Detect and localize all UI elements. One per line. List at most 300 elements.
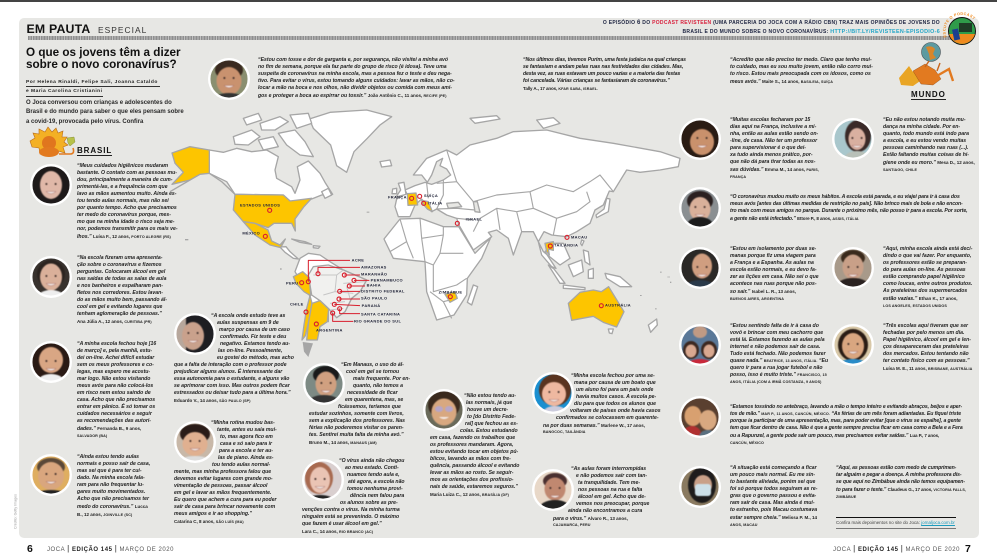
quote: Marlene: confirmados se colocassem em quarente- [556, 414, 659, 420]
quote: Lucca: Acho que não precisamos ter [77, 496, 149, 502]
map labels [240, 193, 631, 332]
footer: right info: JOCA | EDIÇÃO 145 | MARÇO DE 2020 [833, 544, 960, 553]
quote: Maria Luiza: estou evitando tocar em objetos pú- [430, 448, 518, 454]
map labels: ESTADOS UNIDOS [240, 202, 280, 207]
quote: Luísa M: Papel higiênico, álcool em gel e len- [883, 336, 971, 342]
quote: Melissa: foi só porque todos seguiram as re- [730, 486, 817, 492]
quote: Mar and Lua: porque ia participar de uma apresentação, mas, para poder evitar [que o vírus se espalhe], a gente [730, 418, 961, 424]
quote: Luísa F [76, 162, 178, 240]
quote: Beatrice and Francisco: posso, isso é muito triste.” FRANCISCO, 15 [730, 372, 827, 378]
quote: Eduardo: las on-line. Pessoalmente, [218, 348, 282, 354]
quote: Maria Luiza: os professores mandaram. Agora, [430, 442, 513, 448]
quote: Catarina: casa e só saio para ir [220, 440, 272, 446]
map labels: SÃO PAULO [361, 295, 387, 300]
quote: Melissa: to estranho, pois Macau costumava [730, 506, 817, 512]
quote: Emma: sas dúvidas.” Emma M., 14 anos, PARIS, [730, 167, 819, 173]
heading: section subtitle: ESPECIAL [98, 25, 147, 35]
quote: Isabel: BUENOS AIRES, ARGENTINA [730, 296, 784, 300]
photo: Mesa [832, 118, 874, 160]
quote: Catarina: vimentação de pessoas, passar álcool [174, 482, 267, 488]
quote: Maite [730, 56, 873, 84]
map labels: BAHIA [367, 283, 381, 288]
quote: Eduardo: estressados ou deixar tudo para a última hora.” [174, 390, 291, 396]
quote: João [258, 56, 455, 98]
quote: Ana Júlia: fletos nos corredores. Estou lavan- [77, 290, 163, 296]
map labels: ISRAEL [466, 216, 483, 221]
quote: Ana Júlia: cool em gel e evitando lugares que [77, 304, 162, 310]
quote: Melissa: estar sempre cheia.” Melissa P. M., 14 [730, 514, 817, 520]
quote: Catarina: las de piano. Ainda es- [218, 454, 274, 460]
quote: Alvaro: ta tranquilidade. Tem me- [578, 480, 640, 486]
quote: Eduardo: que a falta de interação com o professor pode [174, 362, 287, 368]
quote: Maria Luiza: to [do Distrito Fede- [467, 414, 516, 420]
quote: Marlene [543, 372, 661, 434]
quote: Luísa F: mo que na minha idade o risco seja me- [77, 218, 174, 224]
quote: João: tivo. Para evitar o vírus, estou tomando alguns cuidados: lavar as mãos, não co- [258, 78, 455, 84]
quote: Emma: FRANÇA [730, 175, 746, 179]
quote: Beatrice and Francisco: internet e não podemos sair de casa. [730, 344, 820, 350]
quote: Emma: que não dá para tirar todas as nos- [730, 159, 815, 165]
quote: Bruno [309, 362, 410, 445]
quote: Claudeus: tar alguém e pegar a doença. A minha professora dis- [836, 472, 962, 478]
quote: Alvaro: nos pessoas na rua e falta [578, 486, 642, 492]
quote: Eduardo: março por causa de um caso [219, 327, 290, 333]
map labels: DISTRITO FEDERAL [361, 288, 405, 293]
quote: Luísa F: bastante. O contato com as pessoas mu- [77, 170, 177, 176]
quote: Luísa F: nor, podemos transmitir para os mais ve- [77, 226, 178, 232]
map labels: FRANÇA [388, 194, 407, 199]
quote: Ettore: “O coronavírus mudou muito os meus hábitos. A escola está parada, e eu viajei para ir à casa dos [730, 194, 960, 200]
map labels: SANTA CATARINA [361, 311, 400, 316]
quote: Claudeus: “Aqui, as pessoas estão com medo de cumprimen- [836, 464, 956, 470]
quote: Catarina [174, 420, 277, 524]
British Isles and Iceland [396, 182, 406, 197]
quote: Mesa: giene onde eu moro.” Mesa D., 12 anos, [883, 160, 975, 166]
quote: Ethan: os professores estão se preparan- [883, 260, 967, 266]
quote: Emma: nha, então as aulas estão sendo on- [730, 131, 818, 137]
quote: Marlene: BANGCOC, TAILÂNDIA [543, 430, 586, 434]
photo: Isabel [679, 247, 721, 289]
photo: Fernanda [30, 341, 72, 386]
quote: Luísa M: dos mercados. Estou tentando não [883, 350, 969, 356]
quote: Ana Júlia: Ana Júlia A., 12 anos, CURITIBA (PR) [77, 318, 152, 324]
podcast banner: O EPISÓDIO 6 DO PODCAST REVISTEEN (UMA PARCERIA DO JOCA COM A RÁDIO CBN) TRAZ MAIS OPINIÕES DE JOVENS DO [603, 20, 940, 26]
quote: Catarina: Catarina C, 8 anos, SÃO LUÍS (MA) [174, 518, 244, 524]
quote: Maite: to risco. Estou mais preocupada com os idosos, como os [730, 70, 871, 76]
quote: Emma: dias aqui na França, inclusive a mi- [730, 124, 816, 130]
Peru [293, 272, 311, 296]
quote: Maria Luiza: nais de saúde, estaremos seguros.” [430, 484, 518, 490]
quote: Eduardo: negativo. Estamos tendo au- [220, 341, 290, 347]
Central America and Caribbean [280, 247, 298, 259]
quote: Marlene: na por duas semanas.” Marlene W., 17 anos, [543, 422, 645, 428]
quote: Maria Luiza: quência, passando álcool e evitando [430, 462, 519, 468]
quote: Catarina: “Minha rotina mudou bas- [211, 420, 275, 426]
quote: Tally [523, 56, 686, 91]
quote: Fernanda: legas, mas espero me acostu- [77, 368, 150, 374]
quote: Eduardo: se aprimorar com isso. Mas outros podem ficar [174, 383, 290, 389]
quote: Alvaro: CAJAMARCA, PERU [553, 522, 591, 526]
quote: Luísa F: lavo as mãos aumentou muito. Ainda es- [77, 190, 177, 196]
quote: Eduardo: prejudicar alguns alunos. É interessante dar [174, 369, 282, 375]
quote: Beatrice and Francisco: está lá. Estamos fazendo as aulas pela [730, 336, 825, 342]
map labels: ITÁLIA [428, 200, 443, 205]
quote: Claudeus: se que aqui no Zimbábue ainda não temos equipamen- [836, 478, 965, 484]
quote: Tally: foi cancelada. Várias crianças se fantasiaram de coronavírus.” [523, 78, 670, 84]
quote: Maite: “Acredito que não preciso ter medo. Claro que tenho mui- [730, 56, 872, 62]
quote: Bruno: em quarentena, mas, se [345, 396, 403, 402]
quote: Beatrice and Francisco: quase nada.” BEATRICE, 13 ANOS, ITÁLIA. “Eu [730, 358, 828, 364]
map labels: PERNAMBUCO [371, 277, 403, 282]
Thailand [545, 242, 553, 255]
Greenland [309, 110, 392, 172]
quote: Luísa F: “Meus cuidados higiênicos mudaram [77, 162, 168, 168]
quote: Bruno: estudar sozinhos, somente com livros, [309, 410, 404, 416]
quote: Claudeus [836, 464, 966, 498]
map labels: MACAU [571, 234, 587, 239]
quote: Mesa [882, 117, 975, 172]
map markers [263, 194, 603, 326]
quote: Lara: que fazem é usar álcool em gel.” [302, 520, 382, 526]
quote: Bruno: tes. Sentirei muita falta da minha avó.” [309, 432, 404, 438]
quote: Mesa: “Eu não estou notando muita mu- [883, 117, 966, 123]
quote: João: no fim de semana, porque ela faz parte do grupo de risco (é idosa). Teve uma [258, 64, 447, 70]
quote: Luísa M: Luísa M. E., 11 anos, BRISBANE, AUSTRÁLIA [883, 366, 972, 370]
heading: Mundo: MUNDO [911, 90, 946, 99]
podcast banner [603, 19, 940, 35]
quote: Maria Luiza: blicos, lavando as mãos com fre- [430, 456, 511, 462]
Mexico [243, 222, 285, 248]
photo: Mar and Lua [679, 396, 721, 438]
quote: Lucca: ram para não frequentar lu- [77, 482, 144, 488]
quote: Lara: ao meu estado. Conti- [345, 464, 399, 470]
quote: Ethan [882, 246, 972, 308]
icon: podcast badge: ESCUTE O PODCAST [942, 12, 976, 38]
quote: Ana Júlia [76, 254, 167, 324]
quote: Mesa: SANTIAGO, CHILE [883, 168, 917, 172]
map labels: AMAZONAS [361, 264, 387, 269]
quote: Claudeus: to para fazer o teste.” Claudeus G., 17 anos, VICTORIA FALLS, [836, 486, 966, 492]
quote: Bruno: necessidade de ficar [347, 390, 398, 396]
quote: Maria Luiza: houve um decre- [467, 406, 508, 412]
map labels: ZIMBÁBUE [439, 289, 462, 294]
quote: Bruno: ficássemos, teríamos que [338, 404, 401, 410]
quote: Catarina: Eu quero que achem a cura para eu poder [174, 496, 277, 502]
photo: Alvaro [532, 469, 574, 511]
quote: Beatrice and Francisco: Tudo está fechado. Não podemos fazer [730, 350, 826, 356]
quote: Fernanda: casa. Acho que não precisamos [77, 396, 155, 402]
photo: Bruno [303, 363, 345, 405]
header stripe [28, 36, 953, 40]
quote: Maria Luiza: ral] que fechou as es- [465, 420, 518, 426]
quote: Ana Júlia: e nos banheiros e espalharam pan- [77, 282, 163, 288]
quote: Eduardo: aulas suspensas em 9 de [217, 320, 279, 326]
intro text: Brasil e do mundo para saber o que eles pensam sobre [26, 109, 184, 115]
quote: Luísa F: primentá-las, e a frequência com que [77, 184, 168, 190]
podcast banner: BRASIL E DO MUNDO SOBRE O NOVO CORONAVÍRUS: HTTP://BIT.LY/REVISTEEN-EPISODIO-6 [682, 29, 940, 35]
photo: Beatrice and siblings [679, 324, 721, 366]
quote: Eduardo: “A escola onde estudo teve as [211, 313, 285, 319]
quote: Ettore: meus avós [antes das últimas medidas de restrição no país]. Não brinco mais de bola e não encon- [730, 200, 963, 206]
quote: Ana Júlia: tenham aglomeração de pessoas.” [77, 310, 162, 316]
quote: Beatrice and Francisco: quero ir para a rua jogar futebol e não [730, 364, 823, 370]
quote: Mesa: quanto, todo mundo está indo para [883, 131, 969, 137]
quote: Ettore: tro mais com meus amigos no parque. Durante o próximo mês, não posso ir para a escola. Por sorte, [730, 208, 967, 214]
Canada [209, 148, 333, 201]
quote: Fernanda: de março] e, pela manhã, estu- [77, 348, 152, 354]
quote: Mar and Lua: tem que ficar dentro de casa. Não é que a gente sempre precisa ficar em casa como a Bela e a Fera [730, 424, 963, 430]
Eurasia [395, 130, 680, 268]
quote: Fernanda: entrar em pânico. É só tomar os [77, 404, 155, 410]
quote: Eduardo: Eduardo V., 14 anos, SÃO PAULO (SP) [174, 398, 251, 403]
South America [295, 253, 367, 322]
quote: Melissa: ram sair de casa. Mas ainda é mui- [730, 500, 815, 506]
quote: Emma: “Muitas escolas fecharam por 15 [730, 117, 810, 123]
quote: Ethan: estão vazias.” Ethan K., 17 anos, [883, 296, 957, 302]
quote: Isabel [730, 246, 819, 301]
quote: Ettore: a gente não está infectado.” Ettore P., 8 anos, ASSIS, ITÁLIA [730, 216, 859, 222]
Indonesia [548, 260, 632, 290]
Tasmania and New Zealand [608, 329, 613, 334]
quote: Fernanda: sem os meus professores e co- [77, 362, 154, 368]
quote: Mar and Lua: tos de mão.” MAR P., 11 ANOS, CANCÚN, MÉXICO. “As férias de um mês foram adiantadas. Eu fiquei triste [730, 410, 961, 416]
quote: Luísa M: fechadas por pelo menos um dia. [883, 330, 964, 336]
photo: Luísa M [832, 324, 874, 366]
quote: Fernanda: dei on-line. Achei difícil estudar [77, 354, 154, 360]
quote: Marlene: diu para que todos os alunos que [574, 400, 656, 406]
quote: Bruno: quanto, não temos a [353, 382, 403, 388]
quote: Fernanda: SALVADOR (BA) [77, 434, 107, 438]
photo: Emma [679, 118, 721, 160]
photo: Melissa [679, 466, 721, 508]
quote: Luísa M: “Três escolas aqui tiveram que ser [883, 322, 968, 328]
map connector lines [308, 260, 369, 321]
title: sobre o novo coronavírus? [26, 58, 177, 70]
quote: Catarina: mente, mas minha professora falou que [174, 468, 271, 474]
heading: section title: EM PAUTA [26, 22, 90, 36]
quote: Eduardo [174, 313, 294, 403]
quote: Luísa F: ter medo do coronavírus porque, mes- [77, 212, 171, 218]
photo: Maria Luiza [423, 389, 465, 431]
quote: Mesa: dança na minha cidade. Por en- [883, 124, 960, 130]
quote: Alvaro [552, 466, 650, 527]
map labels: ACRE [352, 257, 364, 262]
photo: Catarina [174, 421, 216, 463]
quote: Luísa M [883, 322, 972, 371]
world map [170, 110, 681, 357]
quote: Isabel: manas porque fiz uma viagem para [730, 252, 816, 258]
quote: Bruno: cool em gel se tornou [346, 368, 399, 374]
Black Sea and Caspian [447, 202, 462, 208]
map labels: MARANHÃO [361, 271, 387, 276]
quote: Mar and Lua [730, 404, 963, 445]
quote: Maria Luiza: levar as mãos ao rosto. Se seguir- [430, 470, 513, 476]
quote: Catarina: tante, antes eu saía mui- [217, 426, 277, 432]
byline: Por Helena Rinaldi, Felipe Sali, Joanna Cataldo [26, 80, 158, 85]
quote: Luísa F: por quanto tempo. Acho que precisamos [77, 204, 177, 210]
quote: Maria Luiza: mos as orientações dos profissio- [430, 476, 513, 482]
quote: Lara: ninguém está se prevenindo. O máximo [302, 514, 399, 520]
quote: Marlene: um aluno foi para um país onde [576, 386, 653, 392]
icon: Brasil mascot [30, 127, 75, 157]
quote: João: “Estou com tosse e dor de garganta e, por segurança, não visitei a minha avó [258, 56, 448, 62]
quote: Ethan: do para aulas on-line. As pessoas [883, 266, 966, 272]
quote: Beatrice and Francisco [730, 322, 828, 384]
quote: Mesa: Estão faltando muitas coisas de hi- [883, 152, 969, 158]
quote: Melissa: to bastante aliviada, porém sei que [730, 478, 815, 484]
quote: Tally: desta vez, as ruas estavam um pouco vazias e a maioria das festas [523, 70, 680, 76]
quote: Ethan: “Aqui, minha escola ainda está deci- [883, 246, 972, 252]
quote: Emma: para supervisionar é o que dei- [730, 145, 806, 151]
quote: Catarina: devemos evitar lugares com grande mo- [174, 476, 273, 482]
quote: Bruno: sem a explicação dos professores. Nas [309, 418, 405, 424]
map labels: SUÍÇA [424, 193, 438, 198]
quote: Catarina: para a escola e ter au- [219, 448, 273, 454]
quote: Mesa: a escola, e eu estou vendo muitas [883, 138, 966, 144]
map labels: ARGENTINA [316, 327, 343, 332]
photo: Ethan [832, 247, 874, 289]
quote: Catarina: meus amigos e ir ao shopping.” [174, 510, 252, 516]
quote: Isabel: escola estão normais, e eu devo fa- [730, 266, 817, 272]
quote: João: suspeita de coronavírus na minha escola, mas a pessoa fez o teste e deu nega- [258, 70, 452, 76]
quote: Alvaro: para o vírus.” Alvaro R., 13 anos, [553, 516, 628, 522]
quote: Lucca: normais e posso sair de casa, [77, 460, 150, 466]
quote: Luísa F: tou tendo aulas normais, mas não sei [77, 198, 169, 204]
quote: Fernanda: cuidados necessários e seguir [77, 410, 152, 416]
map labels: TAILÂNDIA [554, 242, 578, 247]
France [407, 193, 418, 205]
map labels: CHILE [290, 301, 304, 306]
intro text: O Joca conversou com crianças e adolescentes do [26, 100, 172, 106]
quote: Bruno: mais frequente. Por en- [353, 376, 410, 382]
quote: João: gos e proteger a boca ao espirrar ou tossir.” João Antônio C., 11 anos, RECIFE (PE) [258, 92, 447, 98]
quote: Ethan: LOS ANGELES, ESTADOS UNIDOS [883, 304, 947, 308]
quote: Claudeus: ZIMBÁBUE [836, 494, 856, 498]
quote: Maria Luiza: Maria Luiza C., 12 anos, BRASÍLIA (DF) [430, 492, 509, 496]
Italy [422, 200, 432, 212]
quote: Ana Júlia: perguntas. Colocaram álcool em gel [77, 268, 165, 274]
quote: João: locar a mão na boca e nos olhos, não dividir objetos ou comida com meus ami- [258, 84, 452, 90]
quote: Eduardo: eu gostei do método, mas acho [217, 355, 294, 361]
quote: Luísa M: ter contato físico com as pessoas.” [883, 358, 970, 364]
quote: Lucca: medo do coronavírus.” Lucca [77, 504, 148, 510]
quote: Emma: xa tudo ainda menos prático, por- [730, 152, 813, 158]
quote: Fernanda [77, 340, 156, 438]
intro text [26, 100, 184, 124]
quote: Lucca [76, 454, 150, 517]
quote: Maria Luiza: “Não estou tendo au- [464, 392, 516, 398]
footer: right page number: 7 [965, 543, 971, 555]
Zimbabwe [445, 292, 457, 302]
quote: Emma: -line, de casa. Não ter um professor [730, 138, 817, 144]
Africa [384, 218, 491, 320]
quote: Lucca: dado. Na minha escola fala- [77, 474, 145, 480]
quote: Lara: tomou nenhuma provi- [347, 486, 403, 492]
quote: Ethan: dindo o que vai fazer. Por enquanto, [883, 252, 971, 258]
photo: Ana Júlia [30, 256, 72, 298]
quote: Lucca: B., 12 anos, JOINVILLE (SC) [77, 512, 132, 516]
quote: Tally: Tally A., 17 anos, KFAR SABA, ISRAEL. [523, 86, 598, 90]
quote: Lara: dência nem falou para [350, 492, 404, 498]
quote: Fernanda: mar logo. Não estou visitando [77, 376, 150, 382]
quote: Lucca: gares muito movimentados. [77, 488, 145, 494]
quote: Emma [730, 117, 819, 179]
quote: Lara: até agora, a escola não [348, 478, 405, 484]
quote: Alvaro: “As aulas foram interrompidas [571, 466, 646, 472]
photo: Ettore [679, 187, 721, 233]
quote: Luísa F: lhos.” Luísa F., 12 anos, PORTO ALEGRE (RS) [77, 234, 171, 240]
quote: Luísa M: ços desapareceram das prateleiras [883, 344, 969, 350]
quote: Lara: Lara C., 14 anos, RIO BRANCO (AC) [302, 528, 373, 534]
quote: Mar and Lua: “Estamos tossindo no antebraço, lavando a mão o tempo inteiro e evitando abraços, beijos e aper- [730, 404, 962, 410]
map labels: PERU [286, 280, 298, 285]
quote: Eduardo: essa autonomia para o estudante, e alguns vão [174, 376, 289, 382]
quote: Marlene: mana por causa de um boato que [574, 380, 656, 386]
quote: Luísa F: dou, principalmente a maneira de cum- [77, 176, 172, 182]
Brazil [308, 265, 367, 318]
quote: Catarina: em gel e lavar as mãos frequentemente. [174, 490, 271, 496]
quote: Catarina: sair de casa para brincar novamente com [174, 504, 275, 510]
quote: Lara: “O vírus ainda não chegou [339, 458, 404, 464]
map labels: RIO GRANDE DO SUL [354, 318, 402, 323]
quote: Maite: meus avós.” Maite S., 14 anos, BASILEIA, SUÍÇA [730, 78, 833, 84]
Pacific islands [185, 212, 681, 309]
quote: Maite: to cuidado, mas eu sou muito jovem, então não corro mui- [730, 64, 873, 70]
quote: Lucca: mas sei que é para ter cui- [77, 468, 142, 474]
quote: Beatrice and Francisco: vovô e brincar com meu cachorro que [730, 330, 823, 336]
quote: Melissa: gras que o governo passou e evita- [730, 492, 816, 498]
quote: Isabel: “Estou em isolamento por duas se- [730, 246, 816, 252]
map labels: MÉXICO [242, 230, 260, 235]
quote: Lara: os alunos sobre as pre- [340, 500, 398, 506]
quote: Mesa: pessoas caminhando nas ruas (...). [883, 145, 968, 151]
quote: Fernanda: em risco nem estou saindo de [77, 390, 151, 396]
photo: João [208, 58, 250, 100]
quote: Melissa: “A situação está começando a ficar [730, 464, 817, 470]
quote: Bruno: férias não poderemos visitar os paren- [309, 424, 404, 430]
callout: site link: Confira mais depoimentos no site do Joca: jornaljoca.com.br [836, 520, 955, 525]
quote: Mar and Lua: CANCÚN, MÉXICO [730, 440, 764, 444]
quote: Isabel: zer as lições em casa. Não sei o que [730, 274, 819, 280]
quote: Ana Júlia: do as mãos muito bem, passando ál- [77, 296, 167, 302]
quote: Isabel: a França e a Espanha. As aulas na [730, 260, 814, 266]
quote: Catarina: to, mas agora fico em [220, 434, 273, 440]
quote: Alvaro: e não podemos sair com tan- [576, 472, 647, 478]
quote: Isabel: so sair.” Isabel L. R., 13 anos, [730, 288, 796, 294]
quote: Alvaro: vemos nos preocupar, porque [576, 500, 649, 506]
quote: Maria Luiza: colas. Estou estudando [460, 428, 518, 434]
Australia [568, 287, 624, 327]
quote: Ana Júlia: “Na escola fizeram uma apresenta- [77, 254, 162, 260]
quote: Tally: se fantasiam e andam pelas ruas nas festividades das cidades. Mas, [523, 64, 683, 70]
byline: e Maria Carolina Cristianini [26, 89, 102, 94]
callout: site link [836, 517, 956, 529]
quote: Bruno: “Em Manaus, o uso do ál- [341, 362, 404, 368]
quote: Beatrice and Francisco: ANOS, ITÁLIA (COM A IRMÃ COSTANZA, 9 ANOS) [730, 380, 821, 384]
quote: Melissa [730, 464, 818, 527]
intro text: a covid-19, provocada pelo vírus. Confira [26, 118, 143, 124]
quote: Melissa: um pouco mais normal. Eu me sin- [730, 472, 815, 478]
quote: Isabel: acontece nas ruas porque não pos- [730, 280, 817, 286]
quote: Mar and Lua: ou a Rapunzel, a gente pode sair um pouco, mas precisamos evitar saídas.” Lua P., 7 anos, [730, 432, 939, 438]
quote: Lara: venções contra o vírus. Na minha turma [302, 506, 400, 512]
quote: Lara: nuamos tendo aula e, [347, 472, 400, 478]
quote: Lucca: “Ainda estou tendo aulas [77, 454, 139, 460]
Argentina [307, 301, 329, 340]
quote: Ethan: como loucas, entre outros produtos. [883, 280, 972, 286]
quote: Lara [302, 458, 405, 534]
footer: left page number: 6 [27, 543, 33, 555]
